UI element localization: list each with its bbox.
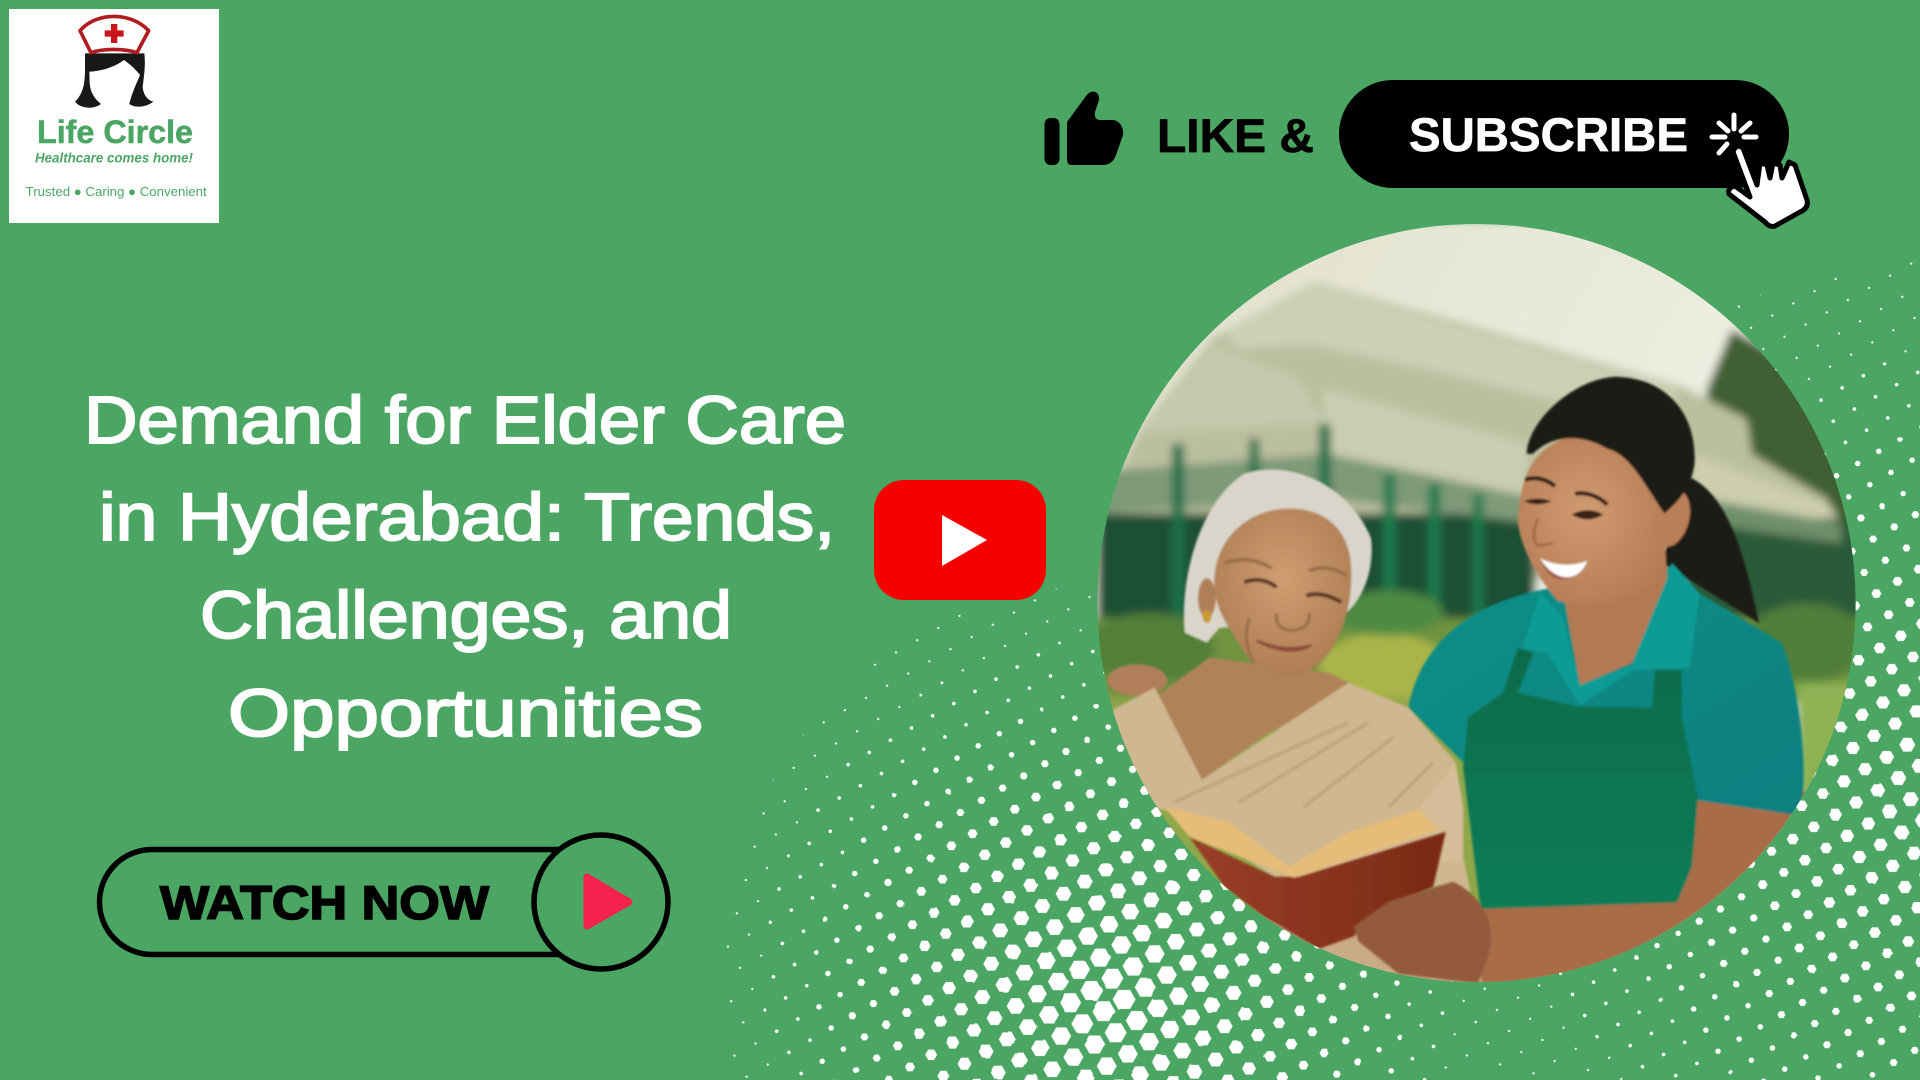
title [84, 383, 846, 751]
like label: LIKE & [1157, 109, 1314, 162]
logo values: Trusted ● Caring ● Convenient [26, 184, 207, 199]
title: Demand for Elder Care [84, 383, 846, 458]
subscribe button [1339, 80, 1789, 188]
watch now label: WATCH NOW [160, 876, 490, 929]
subscribe label: SUBSCRIBE [1409, 108, 1688, 161]
caregiver hand on book [1354, 882, 1491, 984]
watch now button [100, 835, 668, 969]
title: Opportunities [228, 676, 703, 751]
logo tagline: Healthcare comes home! [35, 150, 193, 166]
open red book [1165, 807, 1446, 949]
blurred glasshouse garden background [1085, 220, 1866, 1006]
logo card [9, 9, 219, 223]
icon: hand cursor [1729, 146, 1807, 226]
icon: click sparkle [1712, 115, 1756, 153]
photo: caregiver and elderly woman reading [1085, 220, 1866, 1006]
like and subscribe banner [1044, 80, 1807, 226]
icon: thumbs up [1044, 92, 1123, 165]
icon: nurse with cap [75, 16, 153, 108]
title: Challenges, and [200, 578, 732, 653]
icon: red play triangle [587, 877, 629, 926]
caregiver [1408, 377, 1811, 996]
play circle [534, 835, 668, 969]
elderly woman [1107, 469, 1471, 892]
title: in Hyderabad: Trends, [99, 480, 835, 555]
logo name: Life Circle [37, 114, 193, 150]
icon: youtube play [874, 480, 1046, 600]
